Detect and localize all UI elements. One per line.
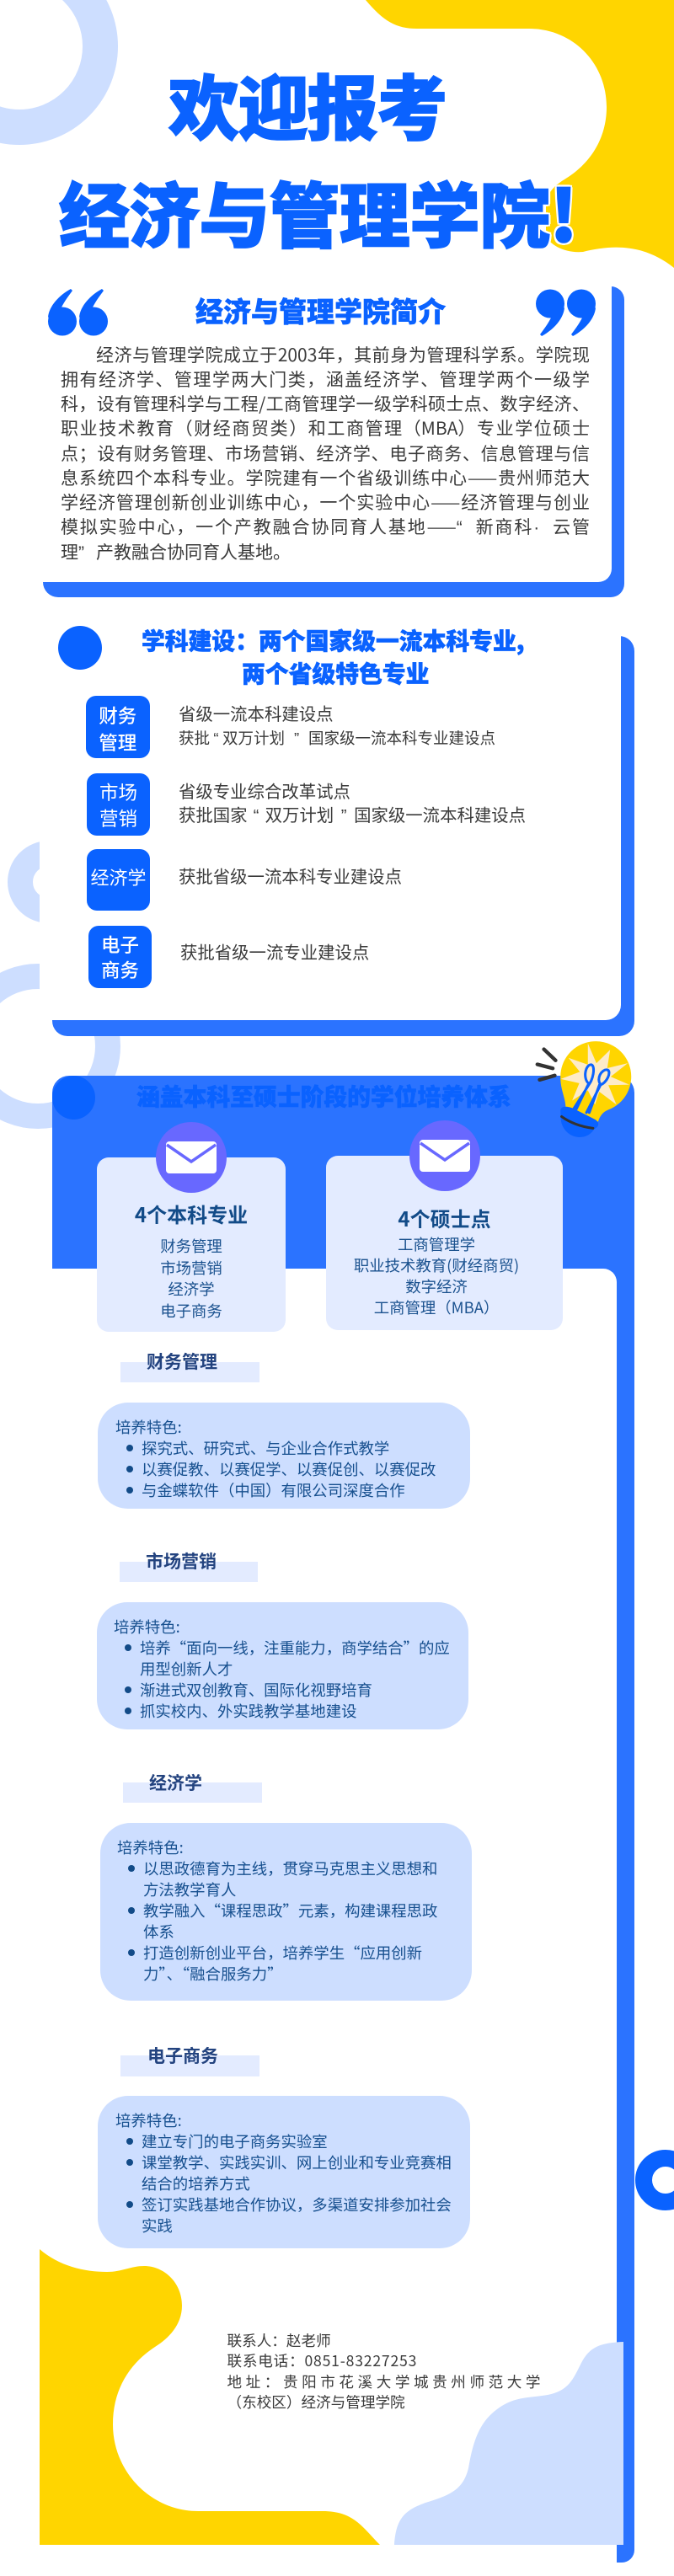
icon: envelope <box>409 1120 480 1191</box>
training features <box>97 1602 468 1729</box>
programme list: 工商管理学 <box>398 1233 475 1255</box>
training features: 用型创新人才 <box>140 1658 233 1680</box>
body text: introduction: —— <box>431 489 460 515</box>
body text: introduction: —— <box>468 465 497 490</box>
card title: 4个硕士点 <box>398 1203 491 1232</box>
description: ” <box>341 807 347 826</box>
training features <box>100 1823 472 2001</box>
heading line 2: 两个省级特色专业 <box>242 656 429 690</box>
programme list: 数字经济 <box>405 1275 468 1297</box>
training features: 体系 <box>143 1921 174 1943</box>
training features: 力”、“融合服务力” <box>143 1963 283 1985</box>
icon: light bulb <box>536 1041 632 1137</box>
badge: 财务 <box>99 702 136 729</box>
item: 经济学 <box>87 849 402 911</box>
training features: 教学融入“课程思政”元素，构建课程思政 <box>143 1899 437 1921</box>
badge <box>87 773 150 836</box>
training features: 与金蝶软件（中国）有限公司深度合作 <box>142 1479 405 1501</box>
tab background <box>120 1562 258 1582</box>
programme list: 工商管理（MBA） <box>374 1296 499 1318</box>
major list <box>160 1235 222 1322</box>
major list: 电子商务 <box>160 1300 222 1322</box>
major list: 经济学 <box>168 1278 215 1300</box>
icon: opening quote <box>48 289 108 335</box>
blob: bottom yellow <box>40 2249 380 2545</box>
description: 省级一流本科建设点 <box>179 700 334 725</box>
badge: 管理 <box>99 729 136 756</box>
body text: introduction: ” <box>78 543 84 563</box>
training features: 抓实校内、外实践教学基地建设 <box>140 1700 356 1722</box>
programme list: 职业技术教育(财经商贸) <box>354 1254 519 1276</box>
heading: degree system: 涵盖本科至硕士阶段的学位培养体系 <box>136 1079 511 1113</box>
item: 市场营销 <box>87 773 526 836</box>
major list: 财务管理 <box>160 1235 222 1257</box>
contact information: （东校区）经济与管理学院 <box>227 2392 405 2413</box>
body text: introduction: 学经济管理创新创业训练中心，一个实验中心 经济管理与创业 <box>61 489 590 515</box>
training features <box>98 2096 470 2248</box>
description: “ <box>254 807 259 826</box>
body text: introduction: · <box>533 518 539 537</box>
tab background <box>123 1782 262 1803</box>
title line 2: 经济与管理学院! <box>59 161 577 263</box>
panel frame <box>52 636 634 1036</box>
training features: 方法教学育人 <box>143 1879 236 1900</box>
major list: 市场营销 <box>160 1257 222 1279</box>
section: 财务管理 <box>98 1349 470 1509</box>
panel inner white <box>43 286 612 582</box>
background decorations <box>0 0 674 1129</box>
card: undergraduate majors <box>97 1122 286 1332</box>
badge <box>87 849 150 911</box>
panel frame <box>52 1076 634 2563</box>
body text: introduction: 职业技术教育 财经商贸类 和工商管理 MBA 专业学位硕士 <box>61 415 590 441</box>
body text: introduction: （ <box>175 420 193 439</box>
body text: introduction: 模拟实验中心，一个产教融合协同育人基地 新商科 云管 <box>61 514 590 539</box>
ring: left middle <box>20 853 78 911</box>
description: 获批省级一流专业建设点 <box>180 938 369 964</box>
card background <box>97 1157 286 1332</box>
description <box>179 700 495 749</box>
badge: 经济学 <box>90 863 147 890</box>
heading line 1: 学科建设：两个国家级一流本科专业, <box>142 623 525 657</box>
badge <box>88 926 152 988</box>
heading: introduction: 经济与管理学院简介 <box>195 290 446 330</box>
description: 获批省级一流本科专业建设点 <box>179 863 402 888</box>
blob: bottom light blue <box>394 2342 623 2545</box>
body text: introduction: ） <box>457 420 475 439</box>
badge: 市场 <box>99 778 137 805</box>
training features: 打造创新创业平台，培养学生“应用创新 <box>143 1941 422 1963</box>
panel: degree system <box>52 1041 634 2563</box>
body text: introduction: 经济与管理学院成立于2003年，其前身为管理科学系。学院现 <box>96 342 590 367</box>
training features: 以思政德育为主线，贯穿马克思主义思想和 <box>143 1857 437 1879</box>
body text: introduction: —— <box>427 514 457 539</box>
footer decorations <box>40 2150 674 2545</box>
tab label: 市场营销 <box>146 1548 217 1574</box>
ring: right edge <box>644 2158 674 2202</box>
training features: 培养特色: <box>117 1836 184 1858</box>
body text: introduction: “ <box>457 518 463 537</box>
body text: introduction: 科，设有管理科学与工程/工商管理学一级学科硕士点、数字经济、 <box>61 391 590 416</box>
panel inner white <box>52 1269 617 2563</box>
panel inner white <box>52 636 621 1020</box>
panel: college introduction <box>43 286 624 597</box>
section: 电子商务 <box>98 2043 470 2248</box>
title line 1: 欢迎报考 <box>168 53 447 155</box>
item: 财务管理 <box>86 696 495 758</box>
card title: 4个本科专业 <box>135 1199 248 1228</box>
icon: envelope <box>156 1122 227 1193</box>
tab background <box>120 1362 259 1382</box>
decorative dot <box>58 626 102 670</box>
training features: 建立专门的电子商务实验室 <box>142 2130 328 2151</box>
ring: left lower <box>0 976 108 1116</box>
blob: top right yellow <box>366 0 674 268</box>
body text: introduction <box>61 342 590 564</box>
card background <box>326 1156 563 1330</box>
tab background <box>120 2055 259 2076</box>
training features: 培养“面向一线，注重能力，商学结合”的应 <box>140 1636 450 1658</box>
body text: introduction: 息系统四个本科专业。学院建有一个省级训练中心 贵州师范大 <box>61 465 590 490</box>
contact information: 联系人：赵老师 <box>227 2330 331 2351</box>
body text: introduction: 拥有经济学、管理学两大门类，涵盖经济学、管理学两个一级学 <box>61 366 590 392</box>
section: 市场营销 <box>97 1548 468 1729</box>
training features: 实践 <box>142 2214 173 2236</box>
training features: 渐进式双创教育、国际化视野培育 <box>140 1678 372 1700</box>
card: master's programmes <box>326 1120 563 1330</box>
description: 省级专业综合改革试点 <box>179 778 350 803</box>
badge: 电子 <box>101 931 139 958</box>
training features: 结合的培养方式 <box>142 2172 250 2194</box>
description: 获批国家 双万计划 国家级一流本科建设点 <box>179 801 526 826</box>
contact information <box>227 2330 541 2413</box>
body text: introduction: （ <box>404 420 421 439</box>
training features: 探究式、研究式、与企业合作式教学 <box>142 1437 389 1459</box>
training features: 培养特色: <box>115 2109 182 2131</box>
body text: introduction: 理 产教融合协同育人基地。 <box>61 539 291 564</box>
badge: 营销 <box>99 804 137 831</box>
training features <box>98 1403 470 1509</box>
tab label: 电子商务 <box>147 2043 218 2068</box>
decorative dot <box>52 1076 95 1120</box>
description <box>179 778 526 826</box>
ring: top left <box>0 0 100 127</box>
description: ” <box>294 730 299 747</box>
badge <box>86 696 150 758</box>
body text: introduction: ） <box>289 420 307 439</box>
programme list <box>354 1233 519 1318</box>
item: 电子商务 <box>88 926 369 988</box>
white mask over rings <box>40 623 621 1036</box>
panel: discipline construction <box>52 623 634 1036</box>
training features: 签订实践基地合作协议，多渠道安排参加社会 <box>142 2194 452 2215</box>
contact information: 地址：贵阳市花溪大学城贵州师范大学 <box>227 2371 541 2392</box>
panel frame <box>43 286 624 597</box>
description: 获批 双万计划 国家级一流本科专业建设点 <box>179 727 495 749</box>
tab label: 经济学 <box>149 1770 202 1795</box>
training features: 以赛促教、以赛促学、以赛促创、以赛促改 <box>142 1458 436 1480</box>
section: 经济学 <box>100 1770 472 2001</box>
body text: introduction: 点；设有财务管理、市场营销、经济学、电子商务、信息管理与信 <box>61 441 590 466</box>
badge: 商务 <box>101 956 139 983</box>
description: “ <box>213 730 219 747</box>
training features: 培养特色: <box>114 1616 180 1638</box>
icon: closing quote <box>536 290 596 336</box>
contact information: 联系电话：0851-83227253 <box>227 2350 417 2371</box>
training features: 课堂教学、实践实训、网上创业和专业竞赛相 <box>142 2151 452 2173</box>
tab label: 财务管理 <box>147 1349 217 1374</box>
training features: 培养特色: <box>115 1416 182 1438</box>
